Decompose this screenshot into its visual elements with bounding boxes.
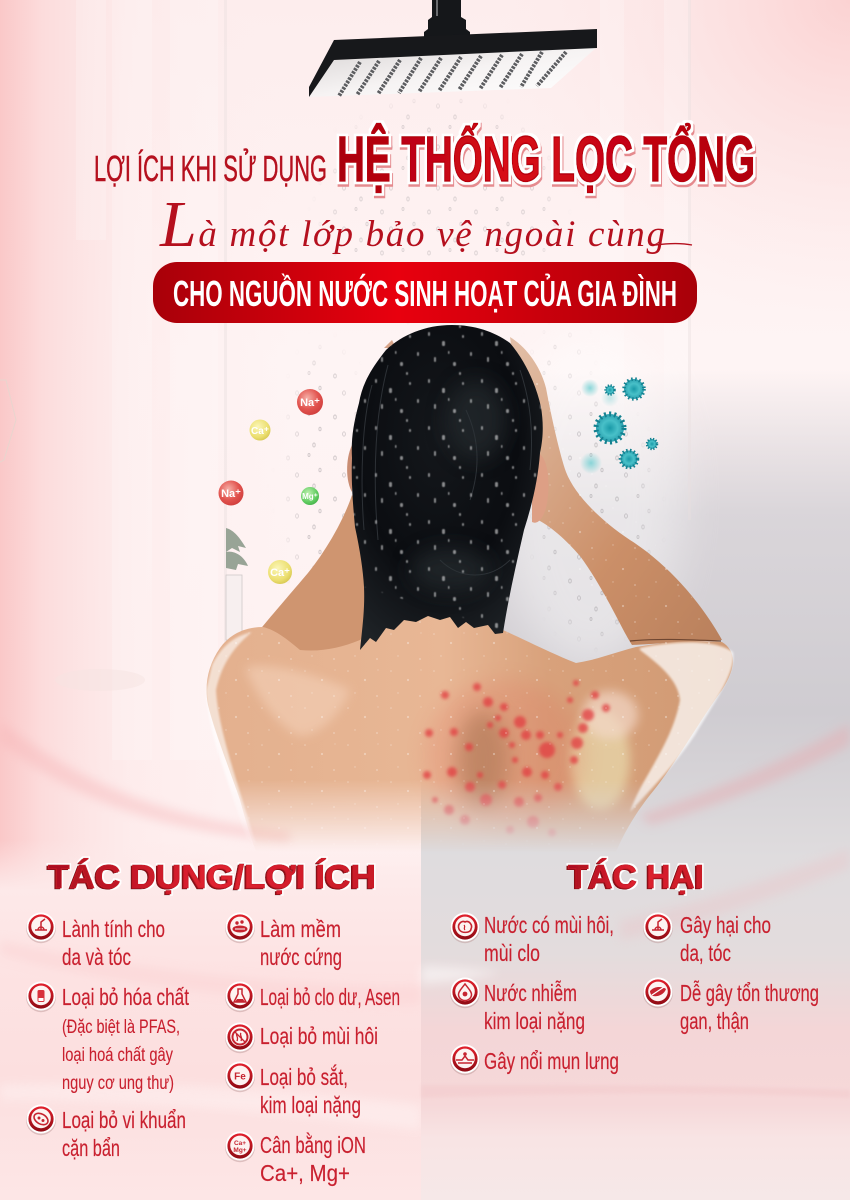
- benefit: removes bacteria: Loại bỏ vi khuẩn: [62, 1107, 186, 1133]
- ion Ca: [268, 560, 292, 584]
- person: ears and fingers: [347, 340, 548, 523]
- harm: smelly water: Nước có mùi hôi,: [484, 912, 614, 938]
- benefit: removes bacteria: cặn bẩn: [62, 1135, 120, 1161]
- icon: Ca Mg: [225, 1132, 255, 1162]
- benefit: removes chemicals: [26, 982, 189, 1094]
- benefit: softens hard water: [225, 912, 342, 970]
- benefit: removes iron, heavy metals: [225, 1062, 361, 1118]
- benefit: softens hard water: Làm mềm: [260, 916, 341, 942]
- ion Na: Na⁺: [300, 397, 320, 409]
- benefit: balances ions: Ca+, Mg+: [260, 1160, 350, 1186]
- benefit: balances ions: [225, 1132, 366, 1186]
- harm: heavy metal water: [450, 978, 585, 1034]
- script subtitle: Là một lớp bảo vệ ngoài cùng: [159, 188, 665, 261]
- ion Ca: Ca⁺: [251, 426, 269, 437]
- benefit: gentle on skin and hair: Lành tính cho: [62, 916, 165, 942]
- benefit: removes iron, heavy metals: Loại bỏ sắt,: [260, 1064, 348, 1090]
- icon: liver and kidney: [643, 978, 673, 1008]
- mineral ions: [218, 389, 323, 584]
- title line 1: [94, 122, 755, 195]
- benefit: removes chlorine, arsenic: Loại bỏ clo dư, Asen: [260, 984, 400, 1010]
- benefit: removes chemicals: loại hoá chất gây: [62, 1045, 173, 1066]
- icon: odour cloud: [450, 912, 480, 943]
- benefit: removes chlorine, arsenic: [225, 982, 400, 1012]
- ion Ca: Ca⁺: [270, 567, 290, 579]
- harm: liver and kidney damage: gan, thận: [680, 1008, 749, 1034]
- harm: damages skin and hair: da, tóc: [680, 940, 731, 966]
- rain shower head: [309, 0, 597, 97]
- icon: iron: Fe: [234, 1072, 246, 1082]
- icon: water softening: [225, 912, 255, 943]
- harm: smelly water: mùi clo: [484, 940, 540, 966]
- harm: damages skin and hair: [643, 912, 771, 966]
- back and shoulders: [206, 610, 733, 862]
- benefit: softens hard water: nước cứng: [260, 944, 342, 970]
- benefit: removes chemicals: (Đặc biệt là PFAS,: [62, 1017, 180, 1038]
- harm: back acne: Gây nổi mụn lưng: [484, 1048, 619, 1074]
- icon: Ca Mg: Mg+: [233, 1147, 247, 1154]
- list: harms column 2: [643, 912, 819, 1034]
- benefit: removes bacteria: [26, 1104, 186, 1161]
- ion Na: Na⁺: [221, 488, 241, 500]
- person: back with skin rash: [206, 337, 733, 862]
- icon: Ca Mg: Ca+: [234, 1140, 246, 1147]
- harm: back acne: [450, 1044, 619, 1075]
- benefit: removes chemicals: Loại bỏ hóa chất: [62, 984, 189, 1010]
- ion Ca: [250, 420, 270, 440]
- harm: damages skin and hair: Gây hại cho: [680, 912, 771, 938]
- list: harms column 1: [450, 912, 619, 1075]
- list: benefits column 2: [225, 912, 400, 1186]
- panel: benefits background: [0, 840, 421, 1200]
- list: benefits column 1: [26, 912, 189, 1161]
- heading: benefits: TÁC DỤNG/LỢI ÍCH: [48, 858, 376, 895]
- harm: smelly water: [450, 912, 614, 966]
- title lead-in: LỢI ÍCH KHI SỬ DỤNG: [94, 147, 327, 189]
- bacteria and viruses: [580, 379, 657, 474]
- body water droplets: [218, 383, 722, 829]
- ion Mg: Mg⁺: [302, 492, 318, 501]
- ion Na: [218, 480, 244, 506]
- ion Na: [297, 389, 323, 415]
- left raised arm: [258, 495, 372, 680]
- benefit: removes odour: Loại bỏ mùi hôi: [260, 1023, 378, 1049]
- icon: test tube: [26, 982, 56, 1012]
- benefit: removes chemicals: nguy cơ ung thư): [62, 1073, 174, 1094]
- benefit: removes odour: [225, 1022, 378, 1053]
- harm: heavy metal water: Nước nhiễm: [484, 980, 577, 1006]
- benefit: gentle on skin and hair: da và tóc: [62, 944, 131, 970]
- icon: no odour: [225, 1022, 255, 1053]
- ion Mg: [301, 487, 319, 505]
- banner: water source: [153, 262, 697, 323]
- background water droplets: [286, 99, 650, 642]
- icon: bacteria: [26, 1104, 56, 1135]
- icon: contaminated drop: [450, 978, 480, 1008]
- rash spots: [423, 680, 610, 837]
- icon: hair follicle: [643, 912, 673, 943]
- benefit: removes iron, heavy metals: kim loại nặng: [260, 1092, 361, 1118]
- icon: skin pimple: [450, 1044, 480, 1075]
- heading: harms: TÁC HẠI: [568, 858, 704, 895]
- right raised arm: [510, 337, 722, 645]
- benefit: balances ions: Cân bằng iON: [260, 1132, 366, 1158]
- icon: hair follicle: [26, 912, 56, 943]
- decorative plant and shelf: [226, 528, 248, 640]
- icon: flask: [225, 982, 255, 1012]
- harm: heavy metal water: kim loại nặng: [484, 1008, 585, 1034]
- skin highlights: [206, 632, 733, 845]
- harm: liver and kidney damage: [643, 978, 819, 1034]
- benefit: gentle on skin and hair: [26, 912, 165, 970]
- panel: harms background: [421, 848, 850, 1200]
- person: wet black hair: [352, 325, 543, 650]
